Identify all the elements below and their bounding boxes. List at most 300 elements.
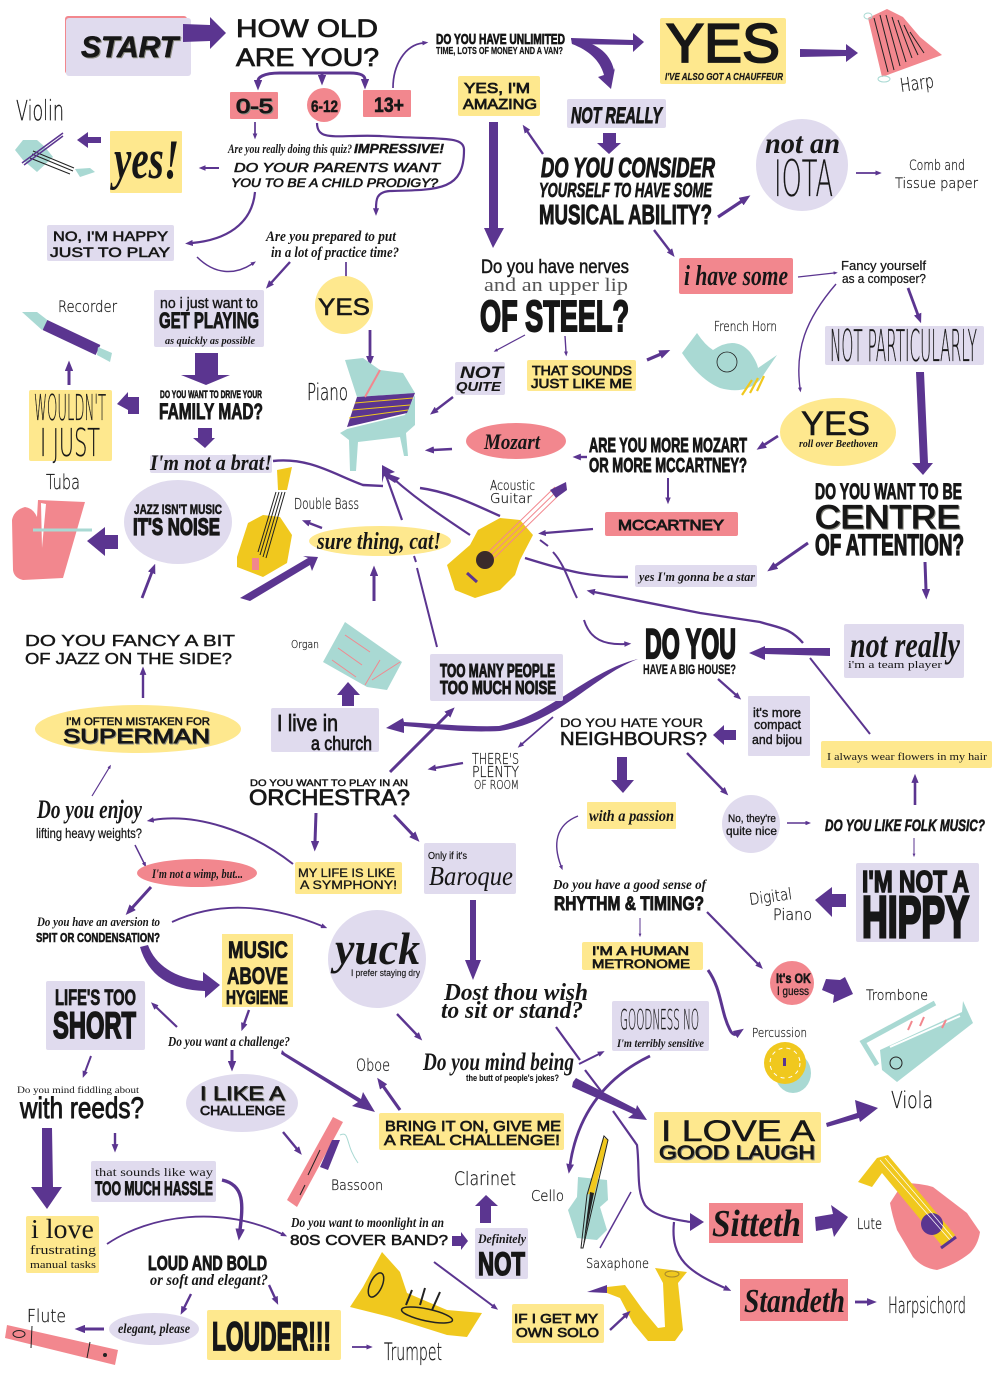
- start box: [65, 16, 191, 76]
- question: with reeds: with reeds?: [19, 1092, 144, 1125]
- arrow: folk to flowers: [914, 782, 916, 805]
- answer: not an iota: IOTA: [774, 150, 833, 208]
- question: child prodigy: IMPRESSIVE!: [354, 141, 445, 156]
- arrow: orchestra to symphony: [315, 813, 316, 842]
- answer: that sounds like me: JUST LIKE ME: [531, 376, 632, 391]
- arrow line: dost thou down: [556, 1027, 690, 1222]
- answer: yes i'm amazing: YES, I'M: [464, 80, 530, 97]
- arrow: prodigy to yes: [205, 167, 219, 169]
- answer: music above hygiene: HYGIENE: [226, 988, 288, 1009]
- question: child prodigy: Are you really doing this quiz?: [227, 141, 352, 156]
- label: saxophone: Saxaphone: [586, 1257, 649, 1272]
- arrow: bijou to neighbours: [713, 725, 736, 745]
- answer: not quite: [455, 362, 505, 395]
- answer: yes roll over beethoven: YES: [801, 405, 870, 443]
- arrow: church to organ: [337, 682, 360, 706]
- question: fancy jazz: DO YOU FANCY A BIT: [25, 633, 235, 650]
- question: musical ability: DO YOU CONSIDER: [541, 152, 716, 183]
- answer: 6-12: [307, 88, 341, 122]
- arrow: reeds big down: [31, 1128, 62, 1209]
- answer: compact and bijou: compact: [754, 717, 801, 732]
- answer: i like a challenge: [186, 1074, 298, 1132]
- arrow: practice to no: [271, 262, 290, 283]
- label: french horn: French Horn: [714, 320, 777, 335]
- answer: mccartney: [605, 512, 738, 536]
- question: heavy weights: lifting heavy weights?: [36, 825, 142, 841]
- question: mind being: Do you mind being: [422, 1049, 574, 1076]
- icon: harp: [864, 9, 942, 82]
- arrow: 0-5 down: [254, 122, 256, 134]
- label: acoustic guitar: [490, 479, 535, 507]
- answer: they're quite nice: quite nice: [726, 824, 777, 838]
- arrow: big down: [181, 353, 230, 385]
- question: musical ability: YOURSELF TO HAVE SOME: [539, 180, 712, 202]
- label: viola: Viola: [891, 1088, 933, 1114]
- answer: i live in a church: a church: [311, 734, 372, 755]
- answer: 13+: 13+: [374, 94, 404, 117]
- answer: own solo: OWN SOLO: [516, 1325, 599, 1340]
- question: practice time: Are you prepared to put: [265, 229, 397, 245]
- arrow: like a challenge to bassoon: [283, 1132, 297, 1149]
- answer: own solo: [512, 1304, 604, 1343]
- answer: jazz isn't music: [124, 480, 232, 564]
- answer: human metronome: METRONOME: [592, 957, 690, 971]
- arrow: attention to not really: [925, 562, 926, 590]
- answer: it's ok: [770, 961, 814, 1005]
- answer: yuck: [328, 910, 426, 1008]
- answer: not really: NOT REALLY: [571, 103, 664, 128]
- arrow: short to reeds: [85, 1056, 91, 1072]
- answer: not really team player: [844, 624, 964, 678]
- arrow: that sounds to horn: [647, 354, 661, 360]
- arrow: orchestra to too many people: [390, 714, 448, 772]
- answer: i have some: i have some: [684, 261, 788, 292]
- answer: no i'm happy: [47, 225, 174, 261]
- answer: they're quite nice: [722, 795, 780, 853]
- answer: only if baroque: Only if it's: [428, 851, 467, 862]
- answer: yes: [110, 129, 182, 193]
- arrow: solo to sax: [610, 1316, 625, 1330]
- question: heavy weights: [36, 795, 142, 841]
- answer: superman: I'M OFTEN MISTAKEN FOR: [66, 716, 210, 728]
- answer: wouldn't i just: I JUST: [40, 421, 100, 465]
- icon: percussion: [764, 1042, 811, 1093]
- answer: 6-12: 6-12: [311, 97, 338, 116]
- arrow: 6-12 winding to practice: [317, 123, 464, 209]
- arrow: rhythm to ok: [707, 912, 758, 964]
- answer: life like a symphony: A SYMPHONY!: [300, 880, 397, 892]
- question: hate your neighbours: [560, 716, 707, 749]
- arrow: family mad to wouldn't: [117, 392, 139, 414]
- icon: lute: [858, 1155, 980, 1270]
- question: centre of attention: CENTRE: [815, 499, 960, 535]
- label: harp: Harp: [899, 70, 935, 97]
- answer: mozart: [466, 423, 566, 459]
- answer: compact and bijou: it's more: [753, 705, 801, 720]
- answer: get playing: [154, 290, 264, 347]
- answer: compact and bijou: [748, 696, 810, 756]
- question: composer: [841, 259, 927, 286]
- answer: jazz isn't music: JAZZ ISN'T MUSIC: [134, 501, 222, 517]
- arrow: big to sure thing: [240, 556, 318, 601]
- answer: yes: yes!: [110, 129, 179, 191]
- answer: not really team player: not really: [850, 625, 961, 665]
- start box: START: [81, 31, 181, 64]
- arrow: rhythm to metronome: [639, 918, 641, 934]
- answer: elegant please: [109, 1313, 199, 1345]
- question: big house: HAVE A BIG HOUSE?: [643, 661, 736, 677]
- answer: 13+: [363, 90, 411, 117]
- arrow: standeth to harpsichord: [855, 1301, 868, 1303]
- question: unlimited: [436, 31, 565, 57]
- arrow: neighbours to nice: [687, 753, 723, 790]
- answer: not quite: NOT: [460, 363, 505, 382]
- arrow: being to laugh: [572, 1078, 647, 1120]
- arrow: 80s to solo: [434, 1262, 493, 1306]
- label: trumpet: Trumpet: [384, 1338, 442, 1366]
- answer: definitely not: Definitely: [477, 1231, 526, 1246]
- label: acoustic guitar: Guitar: [490, 492, 533, 507]
- arrow: symphony to weights: [153, 818, 293, 864]
- question: 80s cover band: Do you want to moonlight in an: [290, 1216, 444, 1231]
- answer: yes i'm amazing: [458, 76, 540, 116]
- question: want a challenge: Do you want a challenge?: [167, 1035, 290, 1050]
- arrow: ok to trombone: [822, 977, 853, 1003]
- text: WOULDN'T: [34, 388, 106, 429]
- arrow: neighbours to there's room: [522, 717, 553, 744]
- label: cello: Cello: [531, 1187, 564, 1205]
- arrow: laugh to viola: [826, 1100, 878, 1127]
- icon: cello: [568, 1136, 608, 1248]
- answer: life's too short: SHORT: [53, 1005, 136, 1046]
- answer: yes roll over beethoven: roll over Beethoven: [799, 438, 878, 450]
- answer: too many people: TOO MUCH NOISE: [440, 678, 556, 698]
- arrow: consider to amazing: [527, 131, 543, 154]
- arrow: flowers to gonna be a star: [594, 592, 803, 643]
- answer: it's ok: It's OK: [776, 970, 811, 986]
- label: digital piano: [748, 884, 812, 924]
- answer: no i'm happy: JUST TO PLAY: [50, 245, 170, 260]
- label: percussion: Percussion: [752, 1026, 807, 1040]
- question: composer: as a composer?: [842, 272, 926, 286]
- question: musical ability: MUSICAL ABILITY?: [539, 199, 712, 230]
- arrow: folk to hippy: [913, 838, 915, 854]
- answer: life's too short: [46, 981, 145, 1050]
- answer: i love frustrating: manual tasks: [30, 1259, 96, 1271]
- arrow: hippy to digital piano: [815, 887, 846, 917]
- question: child prodigy: [227, 141, 445, 190]
- answer: with a passion: with a passion: [589, 808, 674, 825]
- arrow: question to mccartney: [667, 478, 669, 498]
- answer: i like a challenge: CHALLENGE: [200, 1104, 285, 1118]
- arrow: challenge to bring it on: [281, 1050, 375, 1112]
- answer: flowers in hair: [821, 741, 992, 768]
- arrow: unlimited to yes: [571, 33, 644, 52]
- answer: yes circle: YES: [318, 294, 370, 321]
- arrow: passion to rhythm: [557, 816, 578, 866]
- arrow line: too many to piano: [414, 556, 437, 647]
- question: rhythm and timing: [552, 878, 707, 915]
- arrow: big house to church: [386, 659, 638, 733]
- answer: they're quite nice: No, they're: [728, 813, 776, 825]
- icon: guitar: [447, 482, 567, 598]
- question: orchestra: ORCHESTRA?: [249, 785, 410, 810]
- heading: how old are you: ARE YOU?: [236, 44, 379, 72]
- arrow: not quite to piano: [436, 397, 453, 410]
- arrow: weights to wimp: [135, 845, 144, 863]
- question: nerves of steel: and an upper lip: [484, 275, 628, 296]
- answer: i have some: [679, 258, 793, 294]
- arrow: mozart to piano: [433, 449, 452, 450]
- question: spit or condensation: [36, 914, 160, 945]
- label: recorder: Recorder: [58, 297, 117, 316]
- arrow: steel to that sounds: [565, 336, 566, 352]
- answer: with a passion: [587, 802, 676, 829]
- answer: bring it on: A REAL CHALLENGE!: [384, 1132, 560, 1149]
- arrow: start to age: [183, 17, 226, 49]
- answer: life like a symphony: MY LIFE IS LIKE: [298, 868, 395, 880]
- question: dost thou: to sit or stand?: [441, 998, 583, 1024]
- question: fancy jazz: [25, 633, 235, 668]
- question: mozart or mccartney: ARE YOU MORE MOZART: [589, 435, 747, 457]
- icon: french horn: [682, 333, 777, 395]
- answer: i live in a church: I live in: [277, 710, 338, 736]
- arrow: reeds to hassle: [114, 1133, 116, 1145]
- answer: compact and bijou: and bijou: [752, 732, 802, 747]
- arrow: yes to piano: [369, 330, 371, 357]
- answer: louder: LOUDER!!!: [212, 1315, 331, 1359]
- label: lute: Lute: [857, 1215, 882, 1233]
- arrow head: to sitteth: [690, 1213, 704, 1231]
- question: 80s cover band: 80S COVER BAND?: [290, 1233, 448, 1249]
- question: big house: DO YOU: [645, 620, 736, 667]
- answer: yes chauffeur: I'VE ALSO GOT A CHAUFFEUR: [665, 72, 784, 83]
- question: mozart or mccartney: [589, 435, 747, 477]
- icon: violin: [15, 133, 95, 177]
- answer: louder: [207, 1310, 341, 1360]
- answer: get playing: as quickly as possible: [165, 335, 255, 347]
- label: organ: Organ: [291, 638, 319, 651]
- label: violin: Violin: [16, 94, 64, 127]
- label: tuba: Tuba: [46, 470, 80, 494]
- arrow: 80s to not: [452, 1232, 468, 1250]
- arrow: hassle to loud: [222, 1180, 242, 1230]
- answer: flowers in hair: I always wear flowers in my hair: [827, 752, 988, 763]
- answer: not a wimp: [137, 859, 257, 887]
- arrow: hygiene to challenge: [244, 1010, 249, 1024]
- answer: that sounds like me: THAT SOUNDS: [532, 363, 632, 378]
- question: 80s cover band: [290, 1216, 448, 1249]
- question: heavy weights: Do you enjoy: [36, 795, 142, 824]
- answer: standeth: Standeth: [744, 1283, 845, 1320]
- arrow: ability to iota: [718, 201, 742, 217]
- answer: music above hygiene: ABOVE: [227, 963, 288, 990]
- answer: not a brat: I'm not a brat!: [149, 450, 272, 475]
- answer: i love frustrating: [26, 1214, 99, 1273]
- question: musical ability: [539, 152, 716, 230]
- answer: only if baroque: [424, 843, 516, 894]
- icon: trumpet: [350, 1252, 482, 1337]
- label: flute: Flute: [27, 1306, 66, 1327]
- label: comb and tissue paper: [895, 158, 978, 192]
- answer: superman: [35, 705, 241, 753]
- label: digital piano: Piano: [773, 905, 812, 924]
- arrow: lines to piano: [382, 465, 470, 535]
- arrow: baroque to dost thou: [465, 900, 481, 980]
- answer: not an iota: [756, 119, 848, 211]
- arrow: not particularly big down: [912, 372, 933, 475]
- question: mozart or mccartney: OR MORE MCCARTNEY?: [589, 455, 747, 477]
- arrow: room to orchestra: [435, 763, 463, 768]
- arrow: i love to moonlight: [107, 1217, 282, 1244]
- arrow: nice to folk: [787, 822, 806, 824]
- arrow: bring it on to oboe: [383, 1086, 400, 1110]
- answer: life like a symphony: [295, 862, 402, 894]
- arrow: age bracket: [258, 72, 365, 81]
- arrow: superman to jazz: [142, 674, 144, 698]
- label: plenty of room: PLENTY: [472, 763, 519, 781]
- answer: life's too short: LIFE'S TOO: [55, 985, 136, 1010]
- question: spit or condensation: SPIT OR CONDENSATION?: [36, 930, 160, 945]
- arrow: sure thing to bass: [309, 523, 322, 528]
- answer: bring it on: BRING IT ON, GIVE ME: [385, 1118, 561, 1135]
- arrow: sitteth to lute: [815, 1205, 848, 1237]
- question: with reeds: Do you mind fiddling about: [17, 1085, 140, 1095]
- icon: bassoon: [287, 1117, 358, 1207]
- question: family mad: [159, 389, 263, 424]
- arrow: elegant to flute: [84, 1328, 104, 1330]
- question: rhythm and timing: RHYTHM & TIMING?: [554, 894, 704, 915]
- answer: not really team player: i'm a team player: [848, 659, 942, 671]
- answer: love a good laugh: GOOD LAUGH: [659, 1143, 815, 1164]
- arrow: orchestra to baroque: [394, 815, 413, 835]
- answer: music above hygiene: [222, 934, 293, 1009]
- label: plenty of room: OF ROOM: [474, 778, 519, 792]
- arrow: not to clarinet: [475, 1195, 498, 1223]
- answer: bring it on: [379, 1113, 564, 1150]
- answer: that sounds like me: [527, 360, 636, 391]
- arrow: loud to louder: [269, 1285, 275, 1298]
- arrow: not really down: [597, 133, 621, 154]
- answer: not a wimp: I'm not a wimp, but...: [151, 866, 243, 881]
- arrow: big curve to hygiene: [140, 945, 220, 998]
- arrow: question to mozart: [580, 456, 587, 458]
- arrow: wouldn't to recorder: [68, 370, 70, 385]
- answer: 0-5: [230, 92, 278, 119]
- answer: too many people: TOO MANY PEOPLE: [440, 661, 555, 681]
- answer: definitely not: NOT: [478, 1246, 525, 1282]
- label: piano: Piano: [307, 380, 348, 406]
- answer: human metronome: [582, 942, 703, 971]
- question: loud and bold: [148, 1253, 268, 1289]
- arrow: unlimited to not really: [571, 38, 615, 89]
- answer: goodness no: I'm terribly sensitive: [616, 1036, 705, 1050]
- question: nerves of steel: [480, 257, 629, 341]
- arrow line: flowers upward: [810, 658, 870, 734]
- arrow: neighbours big down: [611, 757, 634, 793]
- answer: i'm not a hippy: [856, 863, 979, 950]
- question: hate your neighbours: DO YOU HATE YOUR: [560, 716, 703, 730]
- label: plenty of room: [472, 750, 519, 792]
- question: hate your neighbours: NEIGHBOURS?: [560, 729, 707, 749]
- arrow: up to jazz: [142, 572, 152, 598]
- question: practice time: [265, 229, 399, 261]
- answer: not an iota: not an: [765, 127, 840, 160]
- arrow: happy to practice: [197, 257, 252, 272]
- question: with reeds: [17, 1085, 144, 1125]
- answer: it's ok: I guess: [777, 984, 809, 998]
- answer: i like a challenge: I LIKE A: [200, 1084, 285, 1105]
- icon: recorder: [22, 312, 112, 362]
- answer: sitteth: Sitteth: [712, 1203, 801, 1245]
- question: child prodigy: DO YOUR PARENTS WANT: [234, 160, 441, 175]
- question: big house: [643, 620, 736, 677]
- question: orchestra: DO YOU WANT TO PLAY IN AN: [250, 778, 408, 788]
- icon: piano: [340, 358, 415, 471]
- label: acoustic guitar: Acoustic: [490, 479, 535, 494]
- arrow line: brat to guitar: [273, 460, 500, 516]
- answer: too many people: [430, 654, 563, 701]
- label: digital piano: Digital: [748, 884, 793, 909]
- arrow: mccartney to guitar: [545, 529, 593, 533]
- answer: yuck: I prefer staying dry: [351, 968, 420, 978]
- answer: yes roll over beethoven: [780, 398, 896, 466]
- answer: only if baroque: Baroque: [429, 861, 513, 891]
- icon: tuba: [12, 500, 92, 580]
- question: dost thou: Dost thou wish: [443, 980, 588, 1006]
- arrow: not really to big house: [749, 646, 830, 660]
- question: loud and bold: LOUD AND BOLD: [148, 1253, 267, 1275]
- arrow: iota to comb: [856, 172, 876, 174]
- question: rhythm and timing: Do you have a good sense of: [552, 878, 707, 893]
- label: clarinet: Clarinet: [454, 1168, 516, 1190]
- arrow: 13+ to unlimited: [393, 43, 423, 88]
- answer: no i'm happy: NO, I'M HAPPY: [53, 229, 168, 244]
- heading: how old are you: HOW OLD: [236, 15, 378, 43]
- icon: double bass: [237, 467, 292, 577]
- question: nerves of steel: OF STEEL?: [480, 292, 629, 341]
- arrow: family mad to brat: [193, 428, 215, 448]
- answer: goodness no: [612, 1001, 709, 1051]
- answer: gonna be a star: [635, 565, 757, 587]
- answer: music above hygiene: MUSIC: [228, 937, 288, 964]
- answer: not really: [567, 99, 666, 128]
- arrow: wimp to aversion: [132, 887, 151, 908]
- answer: i love frustrating: i love: [31, 1214, 94, 1244]
- heading: how old are you: [236, 15, 379, 72]
- answer: definitely not: [475, 1228, 528, 1282]
- question: practice time: in a lot of practice time?: [271, 245, 399, 261]
- answer: jazz isn't music: IT'S NOISE: [133, 514, 220, 541]
- arrow: being to goodness no: [579, 1054, 599, 1064]
- arrow: practice to yes: [345, 262, 347, 277]
- answer: yes chauffeur: YES: [666, 12, 780, 74]
- arrow: weights to superman: [92, 768, 109, 796]
- question: dost thou: [441, 980, 588, 1024]
- arrow: branch to standeth: [673, 1222, 725, 1288]
- arrow: yes to harp: [800, 44, 858, 62]
- icon: trombone: [863, 1001, 973, 1082]
- arrow: dashed guitar to big house: [540, 540, 625, 644]
- answer: love a good laugh: I LOVE A: [661, 1115, 815, 1148]
- question: family mad: DO YOU WANT TO DRIVE YOUR: [160, 389, 262, 401]
- label: comb and tissue paper: Comb and: [909, 158, 965, 174]
- question: mind being: the butt of people's jokes?: [466, 1073, 559, 1083]
- arrow: composer to not particularly: [908, 288, 918, 315]
- answer: too much hassle: TOO MUCH HASSLE: [95, 1179, 213, 1200]
- question: unlimited: TIME, LOTS OF MONEY AND A VAN?: [436, 46, 563, 57]
- arrow: ability to have some: [654, 230, 670, 251]
